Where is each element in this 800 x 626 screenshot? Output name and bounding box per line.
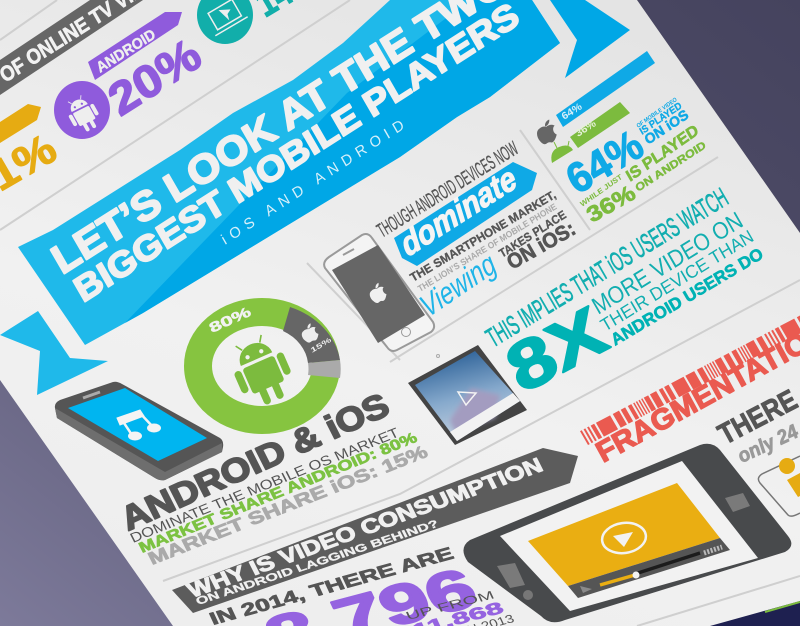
banner body: [18, 0, 560, 345]
play button: [600, 520, 648, 556]
page below sliver: [765, 602, 800, 612]
dark corner under page: [690, 590, 800, 626]
36 percent: 36%: [582, 180, 640, 227]
panel: why lagging: [172, 448, 578, 626]
is played green: IS PLAYED: [624, 122, 702, 185]
subtitle: iOS AND ANDROID: [218, 116, 407, 248]
on ios: ON iOS: [642, 106, 691, 148]
viewing: Viewing: [414, 246, 502, 324]
donut chart: 80%: [206, 303, 254, 336]
smartphone market: THE SMARTPHONE MARKET,: [407, 188, 558, 285]
page edge shadow: [627, 0, 800, 247]
on android: ON ANDROID: [634, 139, 708, 195]
lion share: THE LION’S SHARE OF MOBILE PHONE: [416, 201, 558, 294]
panel: fragmentation: [463, 303, 800, 622]
up from: UP FROM: [403, 588, 497, 623]
donut chart: [198, 303, 341, 420]
dominate word: dominate: [394, 159, 522, 263]
is played: IS PLAYED: [638, 100, 684, 138]
panel: 8x: [408, 182, 767, 445]
icon: apple: [535, 118, 558, 146]
grey band: [0, 0, 143, 95]
more video on: MORE VIDEO ON: [588, 207, 748, 320]
ios bar: [556, 51, 655, 127]
android bar label: 36%: [574, 118, 598, 140]
donut chart: 15%: [310, 336, 334, 355]
phone screen: [500, 461, 758, 611]
ribbon tail left: [0, 311, 108, 395]
dominate hexagon: [394, 162, 537, 266]
info box: [758, 456, 800, 516]
banner shade: [125, 0, 560, 323]
ios share: MARKET SHARE iOS: 15%: [145, 442, 431, 569]
icon: laptop circle: [197, 0, 253, 44]
icon: iphone: [324, 234, 434, 351]
icon: android circle: [54, 81, 110, 139]
dominate line: DOMINATE THE MOBILE OS MARKET: [127, 424, 402, 546]
video frame: [528, 483, 720, 586]
intro text: THOUGH ANDROID DEVICES NOW: [374, 138, 522, 242]
on ios: ON iOS:: [503, 217, 580, 274]
android share: MARKET SHARE ANDROID: 80%: [136, 429, 420, 557]
panel: dominate: [324, 138, 580, 351]
android label: ANDROID: [94, 26, 159, 76]
ios bar label: 64%: [560, 101, 584, 123]
8x: 8X: [495, 293, 618, 407]
64 percent: 64%: [558, 120, 651, 203]
panel: android and ios: [55, 303, 431, 569]
banner: [0, 0, 630, 395]
panel: video share: [535, 51, 708, 227]
control bar: [568, 538, 730, 598]
yellow arrow: [0, 104, 41, 143]
arrow heading: WHY IS VIDEO CONSUMPTION: [184, 454, 547, 602]
of mobile video: OF MOBILE VIDEO: [636, 97, 679, 130]
their device than: THEIR DEVICE THAN: [597, 226, 757, 335]
grey arrow: [172, 448, 578, 613]
purple arrow: [88, 12, 182, 80]
title line 2: BIGGEST MOBILE PLAYERS: [67, 0, 526, 310]
android and ios heading: ANDROID & iOS: [114, 386, 395, 538]
takes place: TAKES PLACE: [496, 207, 569, 261]
while just: WHILE JUST: [578, 172, 624, 209]
arrow subheading: ON ANDROID LAGGING BEHIND?: [194, 518, 441, 608]
android users do: ANDROID USERS DO: [607, 244, 767, 349]
music phone: [55, 382, 223, 480]
ribbon tail right: [550, 0, 630, 78]
android bar: [570, 102, 630, 148]
tablet: [408, 345, 527, 445]
barcode strip: [584, 303, 800, 438]
icon: android head: [551, 141, 573, 163]
big video phone: [463, 444, 791, 622]
panel: online tv views: [0, 0, 324, 200]
android percent: 20%: [99, 28, 209, 126]
